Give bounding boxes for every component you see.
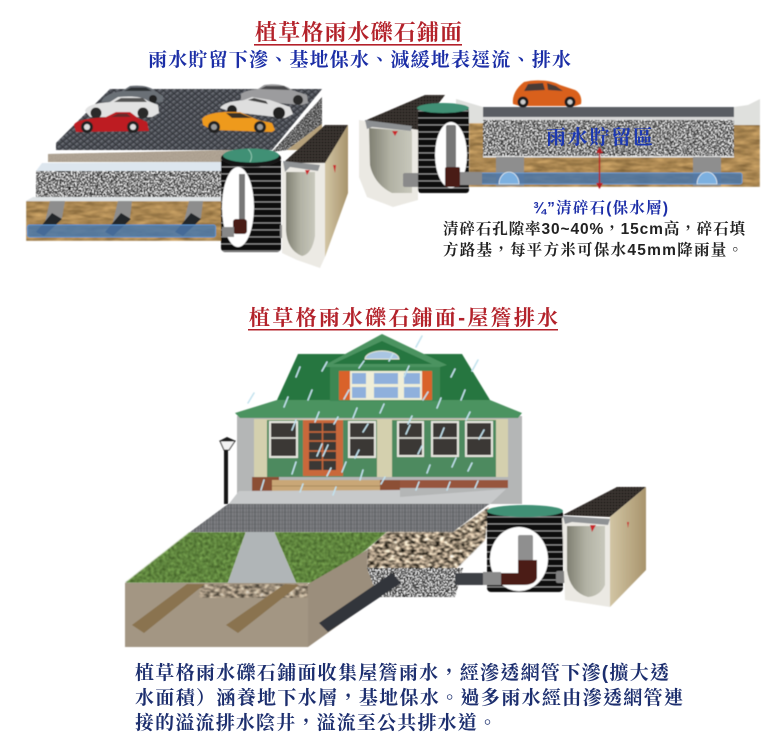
panel: straight cross-section with storage zone: [359, 80, 760, 207]
stone description: 方路基，每平方米可保水45mm降雨量。: [443, 240, 743, 259]
stone description: [443, 219, 747, 259]
gravel columns and pipes: [36, 201, 203, 236]
U channel: [562, 487, 646, 607]
title: top heading: 植草格雨水礫石鋪面: [255, 20, 462, 45]
white lower layer: [26, 197, 223, 201]
grass: [125, 532, 246, 583]
windows: [270, 422, 492, 457]
illustration: site ground section: [125, 487, 646, 647]
blue pipe with domes: [474, 172, 742, 184]
stone description: 清碎石孔隙率30~40%，15cm高，碎石填: [443, 219, 747, 238]
soil layer: [26, 201, 223, 241]
car: red sports car: [74, 112, 149, 133]
white curbs: [734, 99, 760, 125]
illustration: house: [219, 334, 522, 505]
panel: perspective cross-section of paving layers: [26, 84, 348, 268]
steps and brick base: [252, 477, 508, 497]
gravel columns: [496, 157, 524, 186]
tan base layer: [48, 150, 232, 162]
interlocking paving: [190, 504, 489, 532]
rain streaks: [248, 336, 484, 495]
house walls: [237, 416, 522, 504]
soil side face: [308, 550, 378, 647]
overflow well: [221, 148, 287, 252]
description paragraph: 水面積）涵養地下水層，基地保水。過多雨水經由滲透網管連: [135, 686, 683, 709]
U-shaped concrete channel: [282, 125, 348, 268]
concrete walkway: [228, 532, 296, 583]
blue storage pipe: [28, 225, 216, 237]
car: orange sports car: [202, 112, 275, 133]
storage zone label: 雨水貯留區: [546, 125, 653, 149]
description paragraph: [135, 661, 683, 734]
well: [483, 505, 569, 592]
dormer: [325, 334, 447, 401]
cars on parking surface: [74, 84, 308, 133]
soil: [469, 123, 760, 187]
roof eave: [235, 400, 522, 418]
main roof: [277, 354, 490, 400]
car: white left: [85, 96, 159, 118]
grass paver surface: [56, 89, 322, 150]
description paragraph: 植草格雨水礫石鋪面收集屋簷雨水，經滲透網管下滲(擴大透: [135, 661, 670, 684]
car: dark grey rear left: [102, 86, 163, 103]
cobble band on the front: [199, 584, 308, 598]
concrete apron: [228, 489, 506, 505]
orange car: [513, 80, 581, 108]
gravel storage zone: [483, 120, 734, 157]
cobble stone layer: [367, 507, 489, 570]
stone layer label: ¾”清碎石(保水層): [533, 198, 668, 217]
outlet pipe: [455, 573, 483, 585]
soil front face: [125, 583, 308, 647]
gravel layer: [36, 171, 223, 197]
red arrow: [596, 147, 603, 189]
trenches: [132, 584, 205, 633]
road surface: [483, 107, 734, 117]
lamp post: [219, 437, 236, 504]
paving edge gravel: [272, 97, 322, 152]
front door: [303, 420, 343, 476]
well: [417, 103, 482, 193]
description paragraph: 接的溢流排水陰井，溢流至公共排水道。: [135, 711, 497, 734]
channel: [359, 95, 445, 207]
black perforated pipe: [319, 573, 401, 632]
grey gravel layer: [367, 568, 463, 597]
car: grey rear right: [241, 84, 308, 105]
subtitle: 雨水貯留下滲、基地保水、減緩地表逕流、排水: [148, 48, 571, 71]
heading: roof drainage: 植草格雨水礫石鋪面-屋簷排水: [249, 307, 558, 330]
white geotextile layer: [36, 162, 224, 171]
car: white right: [220, 97, 293, 119]
